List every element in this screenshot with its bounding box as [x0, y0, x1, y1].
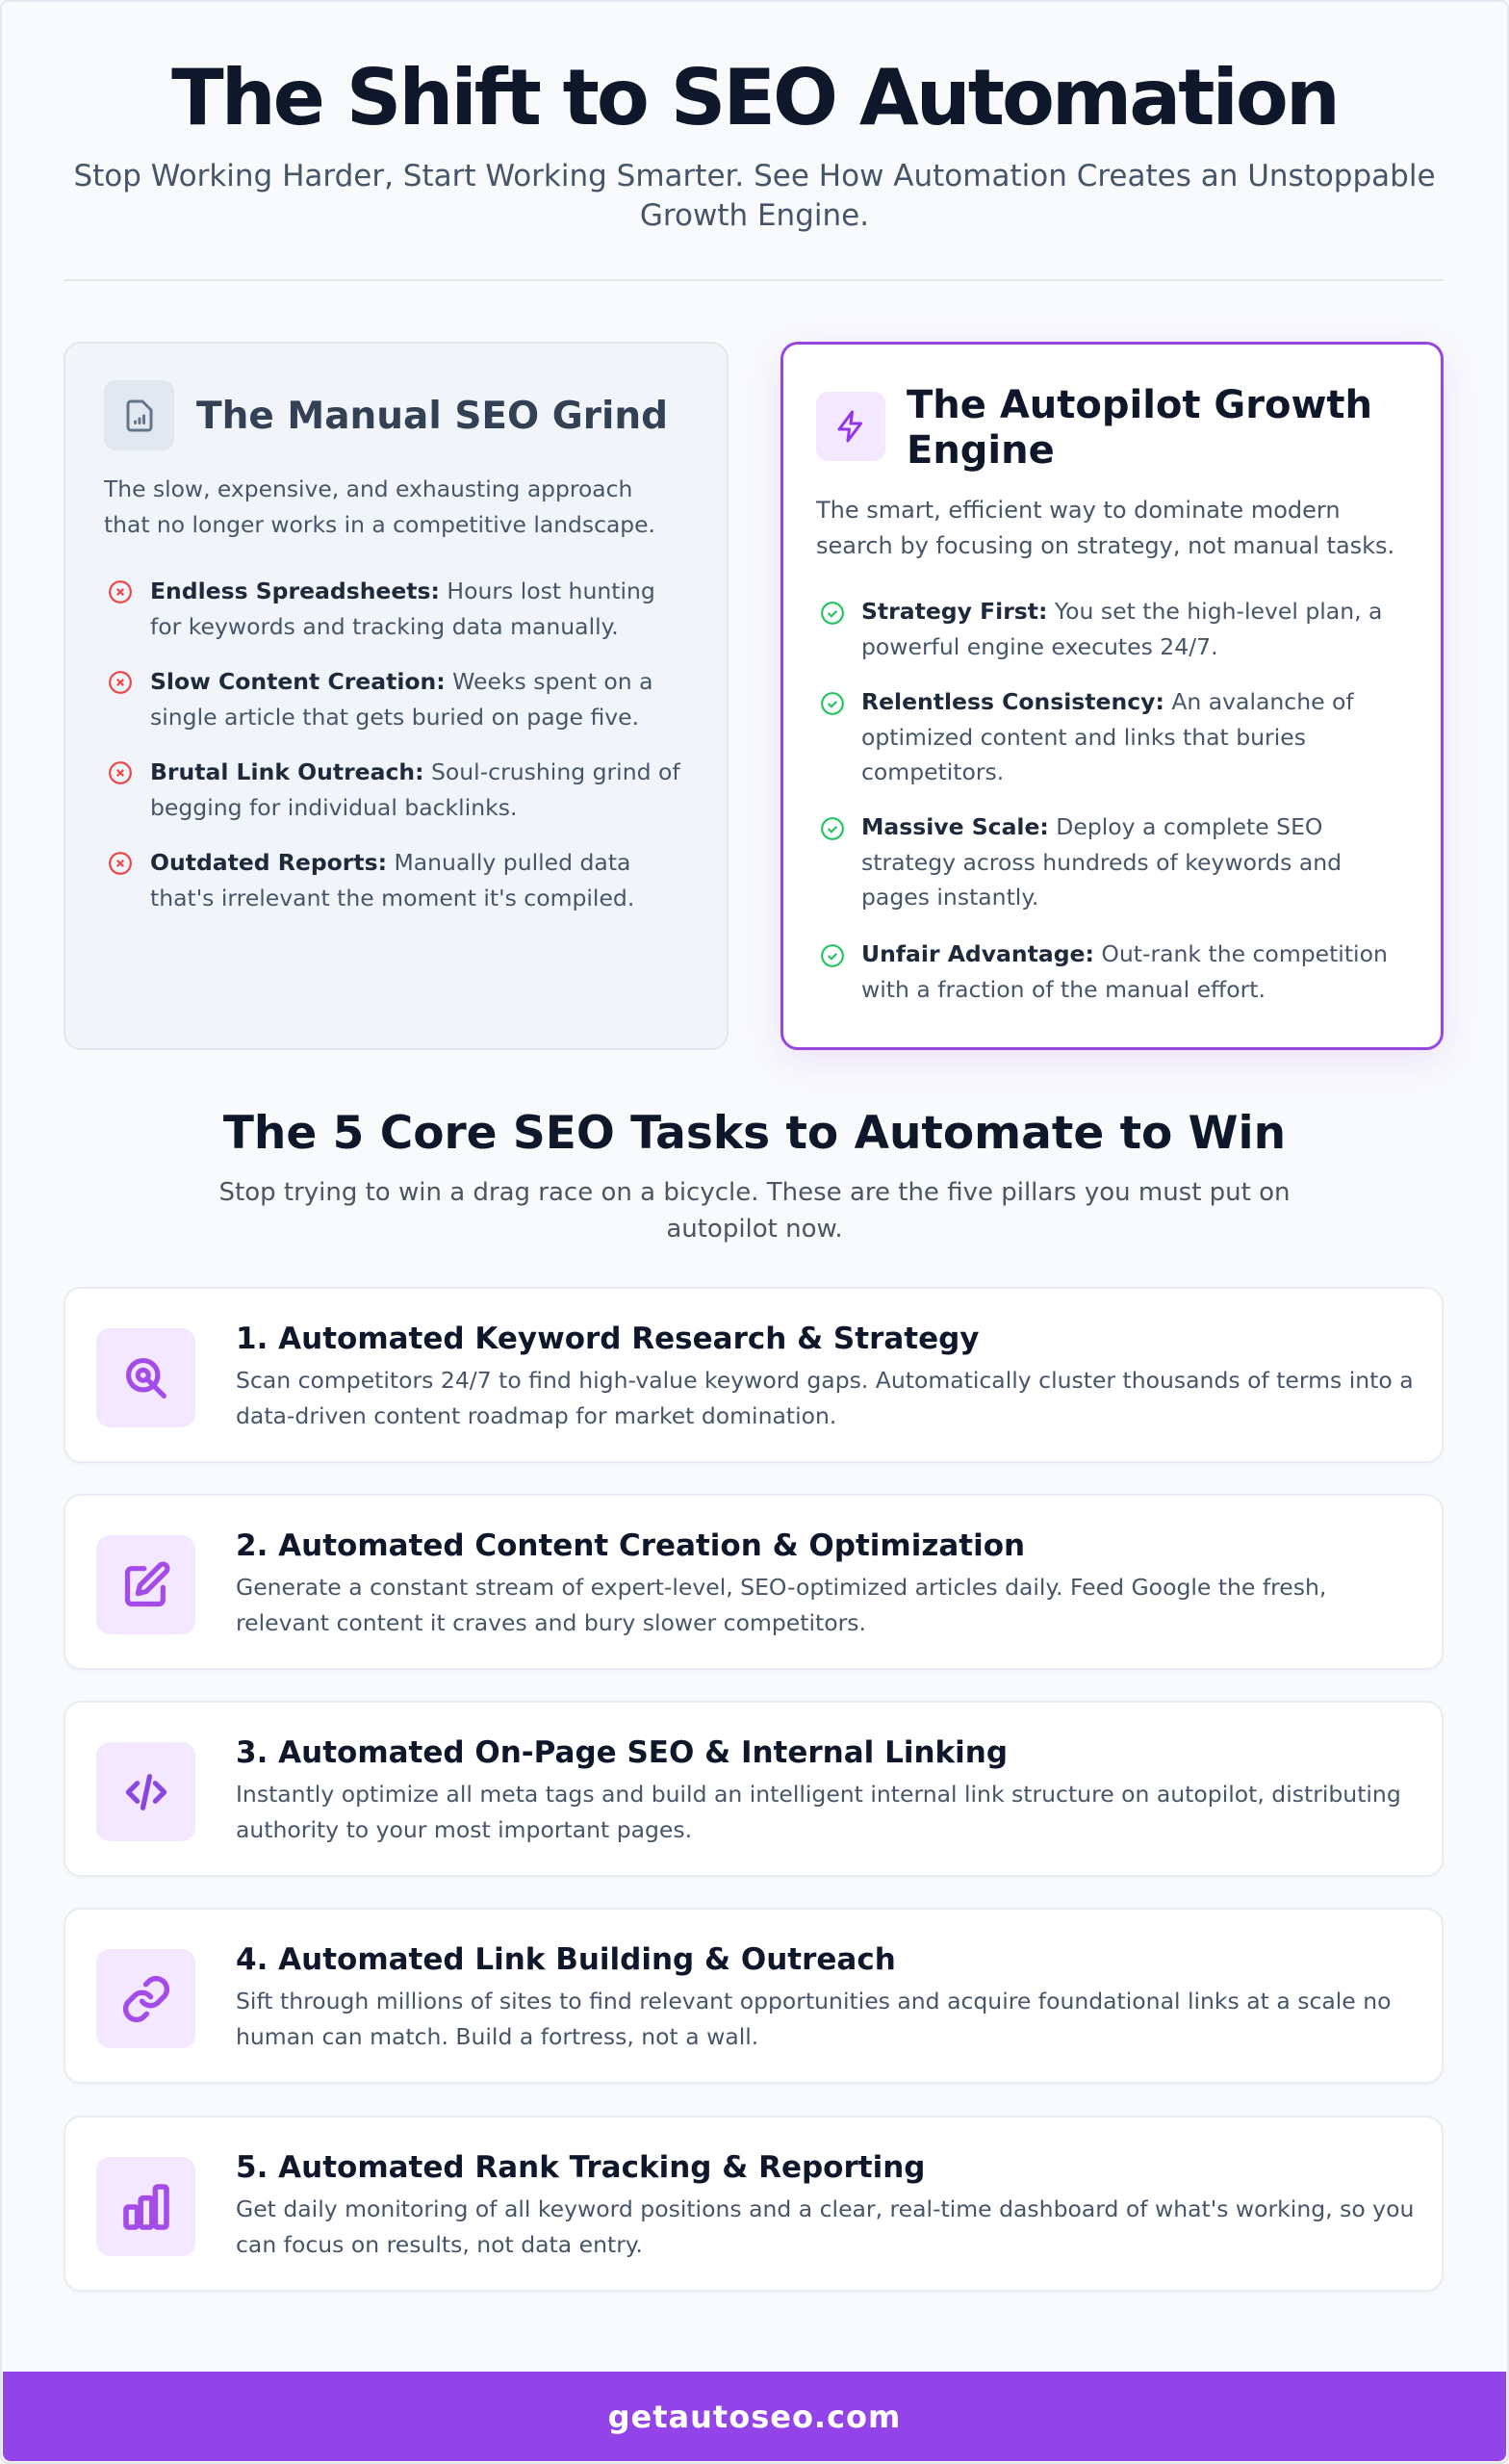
bullet: brutal link outreach: begging for individual backlinks. [150, 793, 517, 820]
description: autopilot: The smart, efficient way to dominate modern [816, 497, 1341, 524]
card text [236, 1781, 1401, 1843]
subtitle: Stop Working Harder, Start Working Smarter. See How Automation Creates an Unstoppable [73, 159, 1436, 193]
card 3: on-page SEO [64, 1701, 1444, 1877]
subtitle: Growth Engine. [640, 198, 869, 233]
heading: autopilot [907, 383, 1372, 473]
bullet: massive scale: strategy across hundreds of keywords and [861, 849, 1342, 876]
bullet: endless spreadsheets: for keywords and tracking data manually. [150, 612, 619, 639]
heading: manual: The Manual SEO Grind [196, 395, 668, 438]
card text [236, 2195, 1414, 2258]
bullet: slow content: Slow Content Creation: Weeks spent on a [150, 668, 653, 695]
heading: autopilot: The Autopilot Growth [907, 383, 1372, 427]
bullet: massive scale: pages instantly. [861, 884, 1038, 911]
card text [236, 1367, 1414, 1429]
card 4: link building [64, 1908, 1444, 2084]
bullet: outdated reports: that's irrelevant the moment it's compiled. [150, 884, 634, 911]
card 2: content creation [64, 1494, 1444, 1670]
bullet: relentless consistency: competitors. [861, 758, 1004, 785]
card text: Sift through millions of sites to find relevant opportunities and acquire foundational links at a scale no [236, 1988, 1392, 2015]
icon: edit [96, 1535, 195, 1634]
card 5: rank tracking [64, 2116, 1444, 2292]
icon: code [96, 1742, 195, 1841]
card 1: keyword research [64, 1287, 1444, 1463]
bullet: strategy first [821, 598, 1382, 660]
bullet: unfair advantage: with a fraction of the manual effort. [861, 976, 1266, 1003]
bullet: slow content: single article that gets buried on page five. [150, 703, 639, 730]
card text: authority to your most important pages. [236, 1816, 692, 1843]
bullet list: autopilot [821, 598, 1388, 1003]
card text [236, 1574, 1326, 1636]
card text: Generate a constant stream of expert-level, SEO-optimized articles daily. Feed Google the fresh, [236, 1574, 1326, 1601]
panel: autopilot growth engine [780, 342, 1444, 1050]
card text: relevant content it craves and bury slower competitors. [236, 1609, 866, 1636]
section subtitle: Stop trying to win a drag race on a bicycle. These are the five pillars you must put on [219, 1178, 1290, 1207]
card title: 5. Automated Rank Tracking & Reporting [236, 2150, 925, 2185]
description: manual [104, 475, 655, 538]
description: manual: that no longer works in a competitive landscape. [104, 511, 655, 538]
card text: human can match. Build a fortress, not a wall. [236, 2023, 758, 2050]
section heading: The 5 Core SEO Tasks to Automate to Win [223, 1107, 1286, 1160]
icon: search [96, 1328, 195, 1427]
subtitle [73, 159, 1436, 233]
bullet: brutal link outreach [109, 758, 681, 820]
bullet list: manual [109, 578, 681, 911]
card title: 2. Automated Content Creation & Optimization [236, 1528, 1025, 1563]
bullet: endless spreadsheets: Endless Spreadsheets: Hours lost hunting [150, 578, 655, 604]
bullet: unfair advantage [821, 940, 1388, 1003]
bullet: relentless consistency: optimized content and links that buries [861, 724, 1306, 751]
section subtitle: autopilot now. [666, 1215, 843, 1244]
card text: Get daily monitoring of all keyword positions and a clear, real-time dashboard of what's working, so you [236, 2195, 1414, 2222]
panel: manual SEO grind [64, 342, 729, 1050]
icon: link [96, 1949, 195, 2048]
section subtitle [219, 1178, 1290, 1244]
bullet: outdated reports: Outdated Reports: Manually pulled data [150, 849, 630, 876]
description: manual: The slow, expensive, and exhausting approach [104, 475, 632, 502]
bullet: strategy first: Strategy First: You set the high-level plan, a [861, 598, 1382, 625]
card text: can focus on results, not data entry. [236, 2231, 643, 2258]
icon: lightning [816, 392, 885, 461]
bullet: outdated reports [109, 849, 634, 911]
bullet: unfair advantage: Unfair Advantage: Out-rank the competition [861, 940, 1388, 967]
bullet: brutal link outreach: Brutal Link Outreach: Soul-crushing grind of [150, 758, 680, 785]
footer: getautoseo.com [608, 2399, 901, 2435]
title: The Shift to SEO Automation [171, 53, 1338, 142]
card title: 3. Automated On-Page SEO & Internal Linking [236, 1735, 1008, 1770]
card text: Scan competitors 24/7 to find high-value keyword gaps. Automatically cluster thousands of terms into a [236, 1367, 1414, 1394]
bullet: massive scale [821, 813, 1342, 911]
bullet: relentless consistency [821, 688, 1355, 785]
bullet: strategy first: powerful engine executes 24/7. [861, 633, 1218, 660]
bullet: relentless consistency: Relentless Consistency: An avalanche of [861, 688, 1354, 715]
bullet: massive scale: Massive Scale: Deploy a complete SEO [861, 813, 1322, 840]
icon: document chart [104, 380, 174, 450]
icon: bar chart [96, 2157, 195, 2256]
card title: 1. Automated Keyword Research & Strategy [236, 1322, 980, 1356]
bullet: slow content [109, 668, 653, 730]
description: autopilot: search by focusing on strategy, not manual tasks. [816, 532, 1394, 559]
heading: autopilot: Engine [907, 428, 1055, 473]
bullet: endless spreadsheets [109, 578, 655, 639]
card text [236, 1988, 1392, 2050]
card text: data-driven content roadmap for market domination. [236, 1402, 836, 1429]
description: autopilot [816, 497, 1394, 559]
card text: Instantly optimize all meta tags and build an intelligent internal link structure on autopilot, distributing [236, 1781, 1401, 1808]
footer [3, 2372, 1506, 2461]
card title: 4. Automated Link Building & Outreach [236, 1942, 896, 1977]
